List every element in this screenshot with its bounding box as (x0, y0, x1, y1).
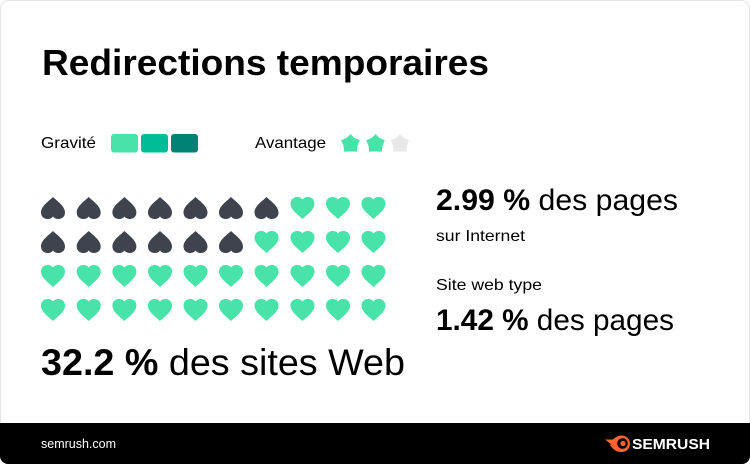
title: Redirections temporaires (42, 42, 489, 83)
severity level 2 (141, 134, 168, 152)
semrush logo (605, 436, 710, 453)
severity level 1 (111, 134, 138, 152)
severity label: Gravité (41, 135, 96, 152)
stat: share of websites: 32.2 % des sites Web (41, 342, 405, 383)
footer bar (0, 423, 750, 464)
severity legend (41, 134, 198, 152)
caption: typical website: Site web type (436, 277, 542, 294)
stat: share of pages on a typical website: 1.42 % des pages (436, 304, 674, 337)
heart chart: 32.2 % of sites (41, 197, 386, 321)
footer url: semrush.com (41, 436, 116, 451)
caption: on the internet: sur Internet (436, 228, 526, 245)
advantage legend (255, 135, 408, 152)
icon: semrush flame (605, 436, 630, 452)
logo wordmark: SEMRUSH (632, 437, 710, 453)
advantage label: Avantage (255, 135, 326, 152)
icon: filled star (367, 135, 384, 151)
stat: share of pages on the internet: 2.99 % des pages (436, 184, 678, 217)
icon: filled star (342, 135, 359, 151)
severity level 3 (171, 134, 198, 152)
icon: empty star (392, 135, 408, 151)
